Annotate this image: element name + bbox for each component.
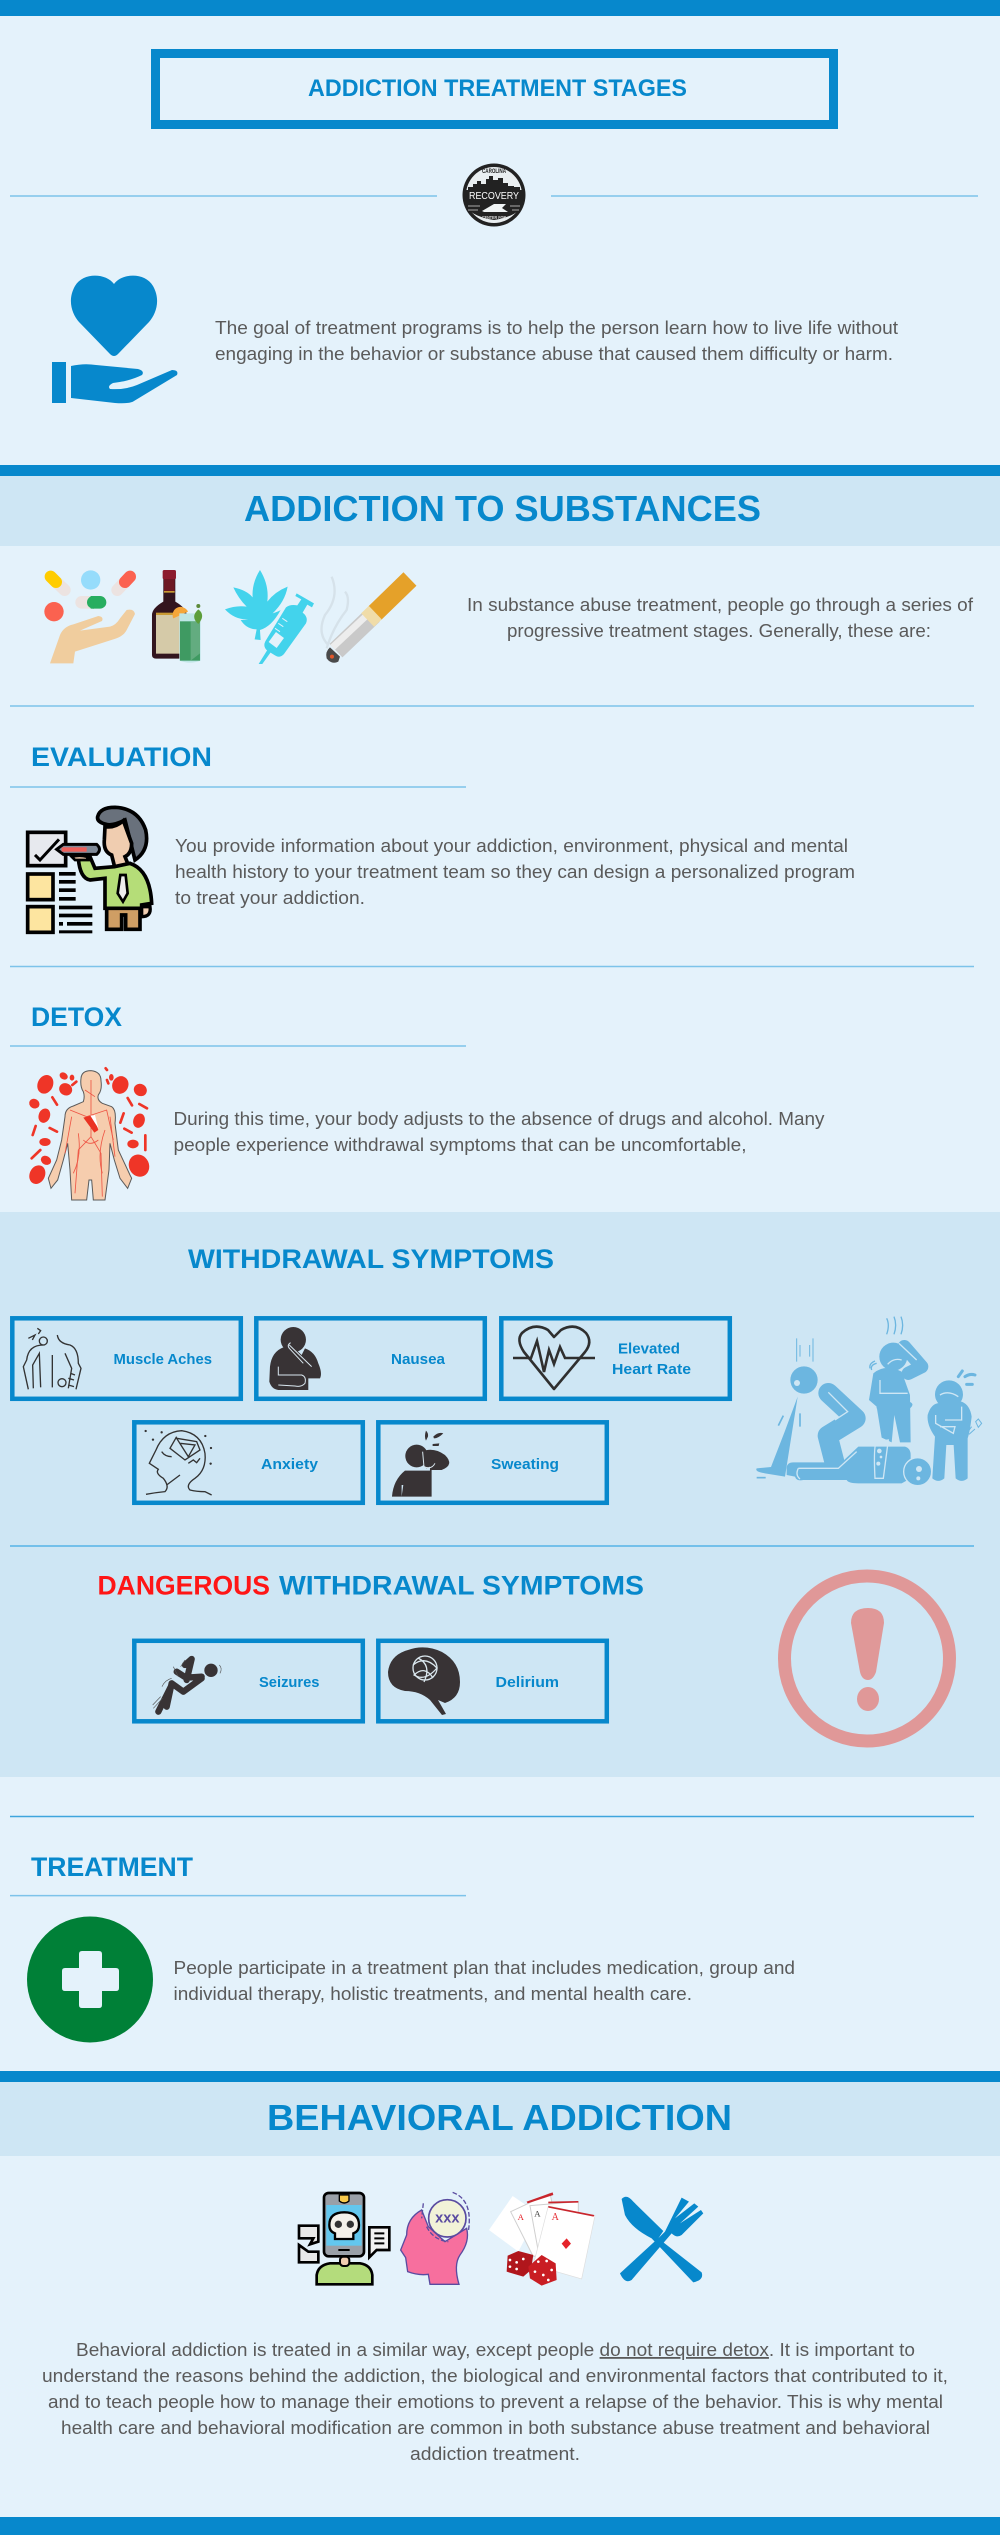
substance intro text: progressive treatment stages. Generally, these are: — [507, 621, 931, 641]
logo: Carolina Recovery: CAROLINA — [482, 169, 506, 175]
intro text: The goal of treatment programs is to help the person learn how to live life without — [215, 318, 898, 338]
section header: behavioral addiction — [0, 2071, 1000, 2156]
icon: playing cards and dice: A — [534, 2209, 541, 2219]
icon: liquor bottle and cocktail — [152, 570, 202, 663]
heading: BEHAVIORAL ADDICTION — [267, 2097, 732, 2138]
evaluation text: You provide information about your addiction, environment, physical and mental — [175, 836, 848, 856]
label: Sweating — [491, 1457, 559, 1473]
intro text: engaging in the behavior or substance abuse that caused them difficulty or harm. — [215, 344, 893, 364]
icon: warning circle — [784, 1576, 950, 1741]
substance intro text — [467, 595, 974, 641]
icon: sick people — [756, 1317, 982, 1486]
icon: head with xxx thought: xxx — [435, 2210, 460, 2226]
bottom bar — [0, 2517, 1000, 2535]
evaluation text: health history to your treatment team so they can design a personalized program — [175, 862, 855, 882]
treatment text: People participate in a treatment plan that includes medication, group and — [174, 1958, 795, 1978]
heading: treatment: TREATMENT — [31, 1852, 193, 1882]
symptom: elevated heart rate: Heart Rate — [612, 1362, 691, 1378]
detox text: people experience withdrawal symptoms that can be uncomfortable, — [174, 1135, 746, 1155]
heading: detox: DETOX — [31, 1002, 122, 1032]
label: Anxiety — [261, 1457, 318, 1473]
icon: playing cards and dice: A — [518, 2212, 525, 2222]
behavioral addiction text: understand the reasons behind the addiction, the biological and environmental factors that contributed to it, — [42, 2366, 948, 2386]
icon: cannabis leaf and syringe — [225, 570, 314, 664]
panel: withdrawal symptoms — [0, 1212, 1000, 1777]
evaluation text — [175, 836, 855, 908]
evaluation text: to treat your addiction. — [175, 888, 365, 908]
detox text — [174, 1109, 824, 1155]
logo: Carolina Recovery — [462, 164, 526, 226]
icon: heart in hand — [52, 276, 177, 403]
symptom: elevated heart rate — [501, 1318, 730, 1399]
heading: ADDICTION TO SUBSTANCES — [244, 488, 761, 529]
behavioral addiction text: and to teach people how to manage their emotions to prevent a relapse of the behavior. This is why mental — [48, 2392, 943, 2412]
symptom: delirium — [378, 1641, 607, 1721]
icon: evaluation person with checklist — [28, 807, 152, 933]
label: Elevated — [618, 1342, 680, 1358]
icon: pills and hand — [44, 570, 135, 663]
label: Muscle Aches — [114, 1352, 212, 1368]
icon: body with blood cells — [26, 1068, 153, 1200]
top bar — [0, 0, 1000, 16]
heading: evaluation: EVALUATION — [31, 742, 212, 772]
behavioral addiction text: Behavioral addiction is treated in a similar way, except people do not require detox . It is important to — [76, 2340, 915, 2360]
symptom: muscle aches — [12, 1318, 241, 1399]
heading: dangerous withdrawal symptoms — [98, 1571, 644, 1601]
icon: head with xxx thought — [401, 2192, 469, 2284]
heading: dangerous withdrawal symptoms: DANGEROUS — [98, 1571, 270, 1601]
symptom: seizures — [134, 1641, 363, 1721]
symptom: anxiety — [134, 1422, 363, 1503]
detox text: During this time, your body adjusts to the absence of drugs and alcohol. Many — [174, 1109, 824, 1129]
section header: addiction to substances — [0, 465, 1000, 546]
icon: playing cards and dice: A — [552, 2212, 560, 2223]
icon: cigarette — [321, 577, 410, 663]
substance intro text: In substance abuse treatment, people go through a series of — [467, 595, 974, 615]
logo: Carolina Recovery: RECOVERY — [469, 191, 519, 202]
heading: dangerous withdrawal symptoms: WITHDRAWAL SYMPTOMS — [279, 1571, 644, 1601]
behavioral addiction text: health care and behavioral modification are common in both substance abuse treatment and behavioral — [61, 2418, 930, 2438]
title: ADDICTION TREATMENT STAGES — [308, 75, 687, 102]
label: Seizures — [259, 1675, 320, 1691]
treatment text — [174, 1958, 795, 2004]
logo: Carolina Recovery: CENTER FOR — [482, 215, 507, 220]
behavioral addiction text: addiction treatment. — [410, 2444, 580, 2464]
label: Delirium — [496, 1675, 559, 1691]
icon: green medical cross — [27, 1916, 153, 2042]
icon: playing cards and dice — [489, 2192, 595, 2286]
treatment text: individual therapy, holistic treatments, and mental health care. — [174, 1984, 692, 2004]
title box — [156, 54, 834, 124]
label: Nausea — [391, 1352, 446, 1368]
symptom: nausea — [256, 1318, 485, 1399]
intro text — [215, 318, 898, 364]
heading: withdrawal symptoms: WITHDRAWAL SYMPTOMS — [188, 1244, 554, 1274]
icon: crossed knife and fork — [620, 2197, 703, 2282]
behavioral addiction text — [42, 2340, 948, 2464]
icon: phone with skull — [299, 2193, 389, 2284]
symptom: sweating — [378, 1422, 607, 1503]
